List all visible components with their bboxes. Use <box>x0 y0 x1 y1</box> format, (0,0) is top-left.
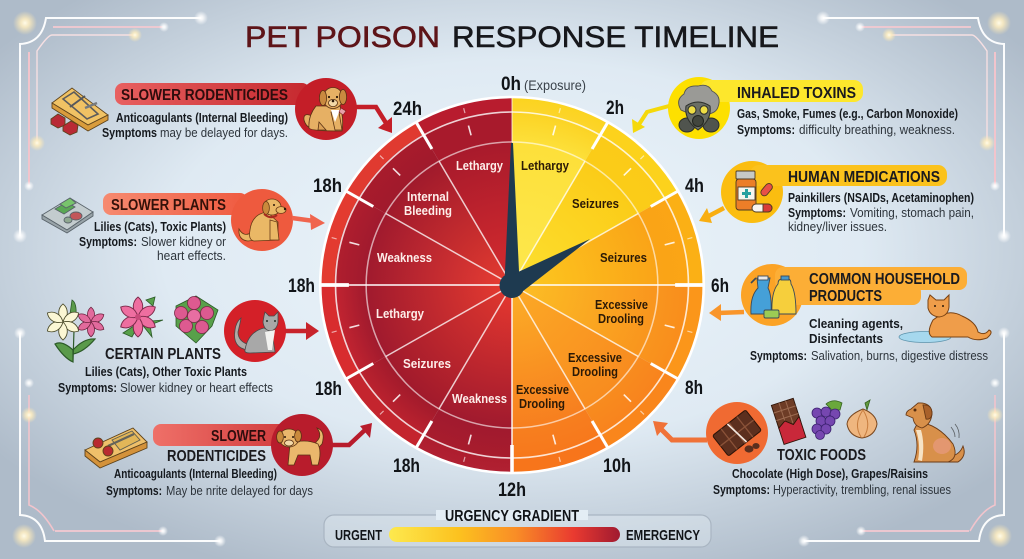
text: agents and symptoms: Lilies (Cats), Other Toxic Plants <box>85 365 247 379</box>
text: agents and symptoms: Slower kidney or <box>141 235 226 249</box>
icon: cat in red circle <box>224 300 286 362</box>
panel: common household products <box>709 264 991 363</box>
icon: mouse trap with bait <box>85 428 147 468</box>
wedge labels: symptoms: Drooling <box>572 364 618 379</box>
heading pill: common household products <box>741 264 967 326</box>
panel: slower rodenticides (top left) <box>51 78 392 140</box>
text: agents and symptoms <box>737 107 958 137</box>
text: agents and symptoms <box>713 467 951 497</box>
wedge labels: symptoms: Seizures <box>572 196 619 211</box>
heading: certain plants: CERTAIN PLANTS <box>105 346 221 363</box>
text: agents and symptoms: Lilies (Cats), Toxic Plants) <box>94 220 226 234</box>
wedge labels: symptoms: Internal <box>407 189 449 204</box>
heading pill: slower plants: SLOWER PLANTS <box>111 197 226 214</box>
hour labels <box>288 74 729 501</box>
hour labels: 18h <box>393 456 420 477</box>
wedge labels: symptoms: Bleeding <box>404 203 452 218</box>
heading pill: common household products: COMMON HOUSEHOLD <box>809 271 960 288</box>
wedge labels: symptoms: Excessive <box>595 297 648 312</box>
heading pill: human medications <box>721 161 947 223</box>
panel: human medications <box>699 161 974 234</box>
text: agents and symptoms <box>106 467 313 498</box>
text: agents and symptoms <box>788 191 974 234</box>
title: PET POISON <box>245 21 440 54</box>
wedge labels: symptoms: Drooling <box>598 311 644 326</box>
text: agents and symptoms: Symptoms: <box>58 381 117 395</box>
heading pill: slower rodenticides: SLOWER RODENTICIDES <box>121 87 288 104</box>
text: agents and symptoms: Vomiting, stomach pain, <box>850 206 974 220</box>
legend: urgency gradient <box>324 508 711 547</box>
text: agents and symptoms: difficulty breathing, weakness. <box>799 123 955 137</box>
text: agents and symptoms: Symptoms: <box>737 123 795 137</box>
text: agents and symptoms: Hyperactivity, trembling, renal issues <box>773 483 951 497</box>
hour labels: 24h <box>393 99 422 120</box>
dial sectors <box>320 97 704 473</box>
arrow <box>355 107 392 133</box>
text: agents and symptoms: Symptoms: <box>750 349 807 363</box>
heading pill: slower rodenticides: RODENTICIDES <box>167 448 266 465</box>
panel: certain plants <box>45 296 319 395</box>
text: agents and symptoms: Symptoms <box>102 126 157 140</box>
icon: puppy in crimson circle <box>271 414 333 476</box>
text: agents and symptoms <box>750 317 988 363</box>
heading pill: inhaled toxins <box>668 77 863 139</box>
text: agents and symptoms: Symptoms: <box>79 235 137 249</box>
hour labels: 18h <box>288 276 315 297</box>
text: agents and symptoms: Chocolate (High Dose), Grapes/Raisins <box>732 467 928 481</box>
arrow <box>292 214 325 230</box>
legend: urgency gradient: URGENCY GRADIENT <box>445 508 579 525</box>
legend: urgency gradient: URGENT <box>335 527 382 544</box>
arrow <box>653 421 707 440</box>
wedge labels: symptoms: Seizures <box>403 356 451 371</box>
hour labels: 18h <box>315 379 342 400</box>
title <box>245 21 779 54</box>
arrow <box>285 322 319 340</box>
icon: chocolate bar in orange circle <box>706 402 768 464</box>
text: agents and symptoms <box>58 365 273 395</box>
icon: dog in orange circle <box>231 189 293 251</box>
wedge labels: symptoms: Weakness <box>377 250 432 265</box>
panel: toxic foods <box>653 398 964 497</box>
text: agents and symptoms: Gas, Smoke, Fumes (e.g., Carbon Monoxide) <box>737 107 958 121</box>
text: agents and symptoms: Disinfectants <box>809 332 883 346</box>
text: agents and symptoms <box>102 111 288 140</box>
icon: lily bouquet <box>45 300 106 362</box>
panel: slower plants <box>42 189 325 263</box>
arrow <box>632 106 669 133</box>
legend: urgency gradient: EMERGENCY <box>626 527 700 544</box>
wedge labels: symptoms: Excessive <box>516 382 569 397</box>
text: agents and symptoms: Symptoms: <box>106 484 162 498</box>
wedge labels: symptoms <box>376 158 648 411</box>
hour labels: 10h <box>603 456 631 477</box>
icon: pink lily <box>118 297 163 337</box>
wedge labels: symptoms: Lethargy <box>521 158 570 173</box>
wedge labels: symptoms: Lethargy <box>376 306 425 321</box>
icon: azalea cluster <box>174 296 218 343</box>
wedge labels: symptoms: Seizures <box>600 250 647 265</box>
icon: pill bottle <box>736 171 774 212</box>
text: agents and symptoms: Cleaning agents, <box>809 317 903 331</box>
text: agents and symptoms: kidney/liver issues. <box>788 220 887 234</box>
arrow <box>699 208 724 223</box>
text: agents and symptoms: Slower kidney or heart effects <box>120 381 273 395</box>
icon: trembling dog <box>906 403 964 464</box>
icon: mouse trap with bait <box>51 88 108 135</box>
text: agents and symptoms: heart effects. <box>157 249 226 263</box>
text: agents and symptoms <box>79 220 226 263</box>
heading pill: slower rodenticides <box>153 424 293 465</box>
heading pill: slower rodenticides: SLOWER <box>211 428 266 445</box>
arrow <box>331 423 372 445</box>
panel: slower rodenticides (bottom left) <box>85 414 372 498</box>
wedge labels: symptoms: Drooling <box>519 396 565 411</box>
hour labels: 18h <box>313 176 342 197</box>
text: agents and symptoms: Symptoms: <box>788 206 846 220</box>
text: agents and symptoms: Painkillers (NSAIDs, Acetaminophen) <box>788 191 974 205</box>
text: agents and symptoms: Anticoagulants (Internal Bleeding) <box>114 467 277 481</box>
icon: onion <box>847 400 877 438</box>
icon: grapes <box>812 401 842 440</box>
hour labels: 12h <box>498 480 526 501</box>
text: agents and symptoms: May be nrite delayed for days <box>166 484 313 498</box>
text: agents and symptoms: may be delayed for days. <box>160 126 288 140</box>
hour labels: 6h <box>711 276 729 297</box>
icon: chocolate bar wrapper <box>771 398 806 444</box>
hour labels: 2h <box>606 98 624 119</box>
wedge labels: symptoms: Excessive <box>568 350 622 365</box>
text: agents and symptoms: Symptoms: <box>713 483 770 497</box>
icon: dog in red circle <box>295 78 357 140</box>
title: RESPONSE TIMELINE <box>452 21 779 54</box>
hour labels: 8h <box>685 378 703 399</box>
heading pill: common household products: PRODUCTS <box>809 288 882 305</box>
icon: cleaning bottles <box>751 276 796 318</box>
heading: toxic foods: TOXIC FOODS <box>777 447 866 464</box>
arrow <box>709 304 744 321</box>
clock hands <box>500 143 590 298</box>
icon: gas mask and smoke <box>679 85 719 132</box>
heading pill: inhaled toxins: INHALED TOXINS <box>737 85 856 102</box>
wedge labels: symptoms: Lethargy <box>456 158 504 173</box>
icon: cat and spilled puddle <box>899 295 991 342</box>
text: agents and symptoms: Salivation, burns, digestive distress <box>811 349 988 363</box>
hour labels: 0h <box>501 74 521 95</box>
panel: inhaled toxins <box>632 77 958 139</box>
clock dial <box>320 97 704 473</box>
heading pill: human medications: HUMAN MEDICATIONS <box>788 169 940 186</box>
text: agents and symptoms: Anticoagulants (Internal Bleeding) <box>116 111 288 125</box>
wedge labels: symptoms: Weakness <box>452 391 507 406</box>
icon: bait tray <box>42 198 93 233</box>
hour labels: (Exposure) <box>524 77 586 93</box>
hour labels: 4h <box>685 176 704 197</box>
